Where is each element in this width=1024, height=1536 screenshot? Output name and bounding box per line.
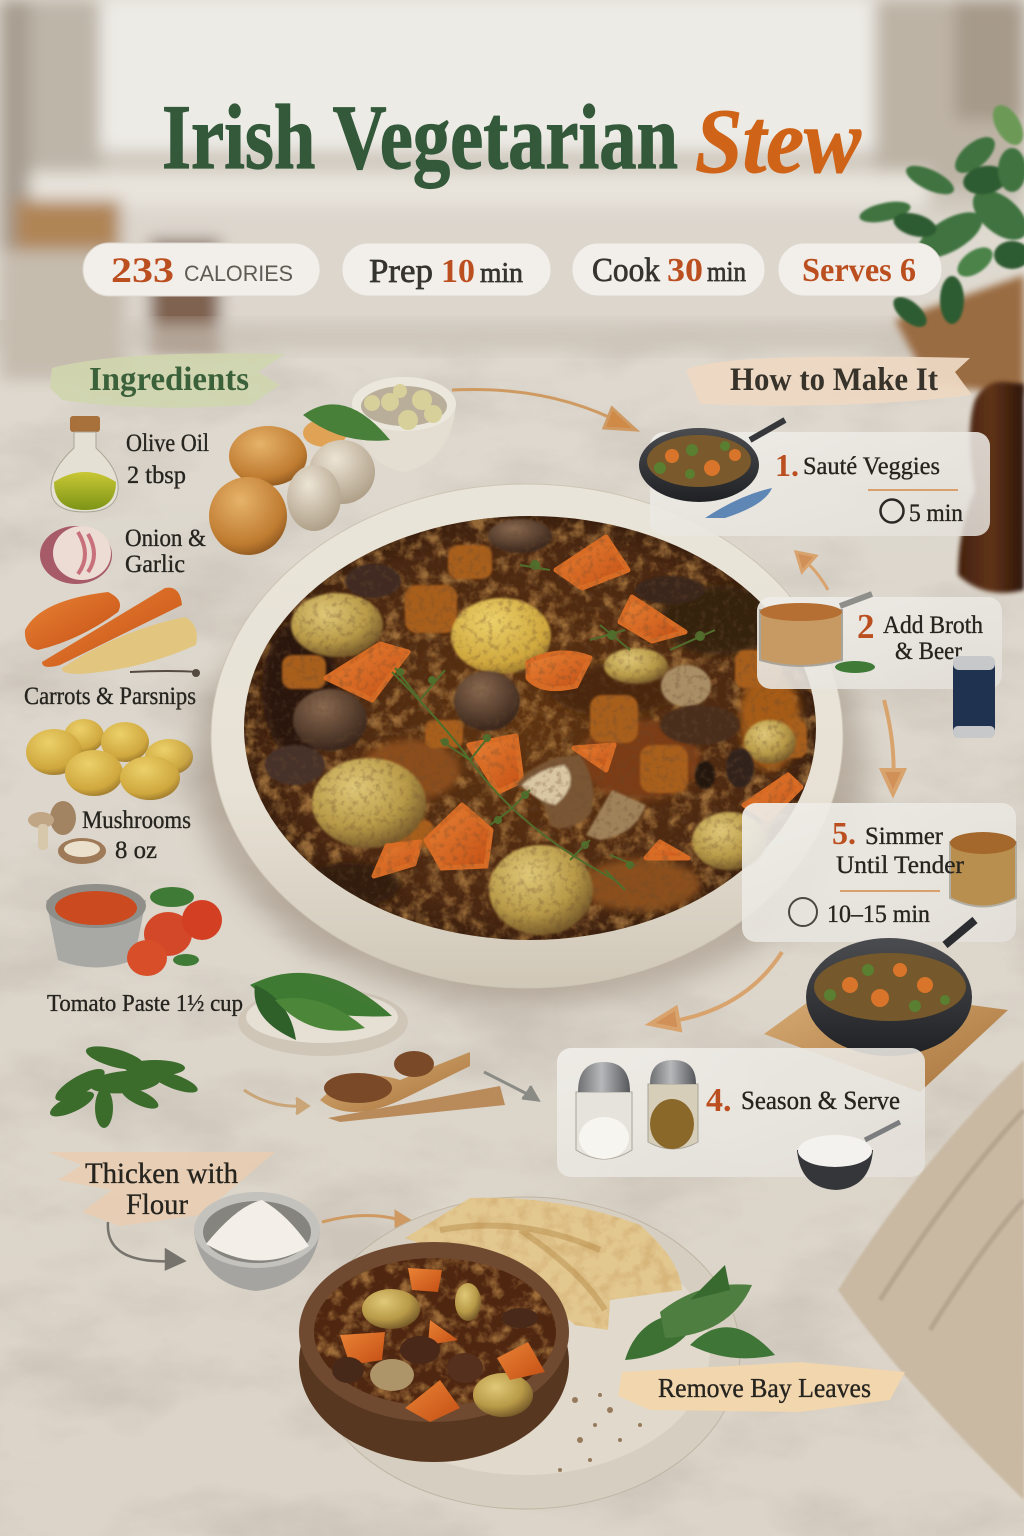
bowl shadow bbox=[195, 535, 865, 1005]
bowl of flour bbox=[194, 1192, 320, 1291]
step 5: simmer until tender: 5. bbox=[832, 815, 856, 851]
heading: How to Make It: How to Make It bbox=[730, 362, 938, 398]
icon: skillet bbox=[639, 420, 785, 518]
potatoes bbox=[291, 593, 796, 935]
step 1: saute veggies: 1. bbox=[775, 447, 799, 483]
pill: prep time: 10 bbox=[441, 253, 475, 290]
serving bowl of stew bbox=[299, 1242, 569, 1462]
arrow: step 2 to step 1 bbox=[796, 552, 828, 590]
ingredient: olive oil: 2 tbsp bbox=[127, 462, 186, 489]
icon: cut onion bbox=[40, 526, 112, 584]
heading: Ingredients: Ingredients bbox=[89, 361, 249, 398]
ingredient: tomato paste: Tomato Paste 1½ cup bbox=[47, 991, 243, 1017]
step 2: add broth and beer: Add Broth bbox=[883, 612, 983, 639]
icon: tomato paste bowl bbox=[46, 884, 146, 968]
ingredient: carrots and parsnips bbox=[24, 588, 200, 710]
icon: oil bottle bbox=[51, 416, 118, 512]
onions and garlic pile bbox=[209, 419, 375, 555]
step 2: add broth and beer: 2 bbox=[857, 607, 874, 646]
heading: How to Make It bbox=[686, 356, 972, 406]
icon: mushrooms bbox=[28, 801, 106, 864]
label: thicken with flour: Flour bbox=[126, 1188, 188, 1221]
mushrooms bbox=[265, 519, 754, 840]
arrow: flour to plate bbox=[322, 1212, 412, 1226]
step 4: season and serve: 4. bbox=[706, 1082, 732, 1119]
plate with bay leaves bbox=[238, 973, 408, 1056]
pill: calories: CALORIES bbox=[184, 261, 293, 286]
soda bread bbox=[400, 1195, 685, 1335]
ingredient: olive oil bbox=[51, 416, 209, 512]
label: remove bay leaves: Remove Bay Leaves bbox=[658, 1373, 871, 1403]
icon: glass of broth bbox=[760, 594, 875, 673]
icon: jar of broth bbox=[950, 832, 1016, 906]
step 5: simmer until tender: Until Tender bbox=[836, 852, 965, 879]
step 2: add broth and beer: & Beer bbox=[895, 638, 963, 665]
small bowl with beans and leaves bbox=[303, 377, 456, 472]
step 1: saute veggies: Sauté Veggies bbox=[803, 453, 940, 480]
arrow: skillet to step 4 bbox=[650, 952, 782, 1030]
step 5: simmer until tender bbox=[742, 803, 1016, 942]
pepper mill, right edge bbox=[958, 382, 1024, 593]
plant and terracotta pot, top right bbox=[856, 100, 1024, 395]
card bbox=[742, 803, 1016, 942]
card bbox=[557, 1048, 925, 1177]
ingredient: olive oil: Olive Oil bbox=[126, 430, 209, 457]
title: Stew bbox=[695, 90, 862, 192]
ingredient: mushrooms bbox=[28, 801, 191, 864]
arrow: flour label to bowl bbox=[108, 1222, 184, 1269]
small arrows, lower left bbox=[244, 1072, 538, 1114]
serving plate bbox=[310, 1197, 740, 1509]
ingredient: onion and garlic: Garlic bbox=[125, 551, 185, 578]
label: thicken with flour: Thicken with bbox=[85, 1157, 238, 1190]
ingredient: mushrooms: 8 oz bbox=[115, 837, 157, 864]
bay leaves on plate bbox=[625, 1265, 775, 1360]
ingredient: tomato paste bbox=[46, 884, 243, 1017]
ceramic bowl bbox=[211, 484, 843, 988]
ingredient: onion and garlic: Onion & bbox=[125, 525, 206, 552]
step 5: simmer until tender: 10–15 min bbox=[827, 901, 930, 928]
label: thicken with flour bbox=[48, 1152, 275, 1226]
heading: Ingredients bbox=[50, 353, 285, 408]
step 1: saute veggies: 5 min bbox=[909, 500, 963, 527]
step 1: saute veggies bbox=[639, 420, 990, 536]
wooden spoon with seasoning bbox=[320, 1051, 505, 1122]
arrow: bean bowl to step 1 bbox=[452, 389, 636, 430]
icon: pepper shaker bbox=[648, 1060, 698, 1149]
step 4: season and serve bbox=[557, 1048, 925, 1190]
step 5: simmer until tender: Simmer bbox=[865, 823, 944, 850]
stew grain overlay bbox=[240, 510, 820, 945]
herb sprig bbox=[47, 1042, 200, 1128]
card bbox=[650, 432, 990, 536]
orange vegetable chunks bbox=[282, 545, 807, 848]
icon: salt bowl with spoon bbox=[797, 1122, 900, 1190]
icon: carrots and parsnip bbox=[25, 588, 200, 677]
pill: servings bbox=[778, 243, 942, 296]
pill: prep time: min bbox=[480, 258, 523, 289]
large bowl of stew bbox=[195, 484, 865, 1005]
pill: cook time: Cook bbox=[592, 252, 660, 289]
title: Irish Vegetarian bbox=[162, 86, 678, 188]
arrow: step 2 to step 5 bbox=[882, 700, 904, 794]
linen towel, lower right bbox=[838, 1060, 1024, 1500]
label: remove bay leaves bbox=[618, 1362, 905, 1412]
pill: cook time bbox=[572, 243, 765, 296]
stat pills bbox=[83, 243, 942, 296]
pill: servings: Serves 6 bbox=[802, 252, 916, 289]
pill: cook time: min bbox=[707, 257, 746, 288]
carrots bbox=[326, 537, 801, 876]
stew surface bbox=[244, 516, 816, 940]
skillet on cutting board bbox=[764, 920, 1008, 1092]
pill: calories bbox=[83, 243, 320, 296]
pill: cook time: 30 bbox=[667, 252, 703, 289]
pill: calories: 233 bbox=[111, 250, 174, 290]
pill: prep time bbox=[342, 243, 551, 296]
icon: beer can bbox=[953, 656, 995, 738]
ingredient: mushrooms: Mushrooms bbox=[82, 807, 191, 834]
card bbox=[757, 597, 1002, 689]
icon: timer bbox=[880, 500, 904, 522]
icon: tomatoes bbox=[127, 887, 222, 976]
icon: salt shaker bbox=[576, 1062, 632, 1159]
icon: clock bbox=[789, 898, 817, 926]
ingredient: carrots and parsnips: Carrots & Parsnips bbox=[24, 683, 196, 710]
pill: prep time: Prep bbox=[369, 253, 433, 290]
stew vegetables bbox=[332, 1268, 545, 1422]
step 4: season and serve: Season & Serve bbox=[741, 1086, 900, 1115]
step 2: add broth and beer bbox=[757, 594, 1002, 738]
sauce texture bbox=[240, 510, 820, 945]
thyme sprig bbox=[392, 560, 715, 890]
ingredient: potatoes bbox=[26, 719, 193, 800]
ingredient: onion and garlic bbox=[40, 525, 206, 584]
